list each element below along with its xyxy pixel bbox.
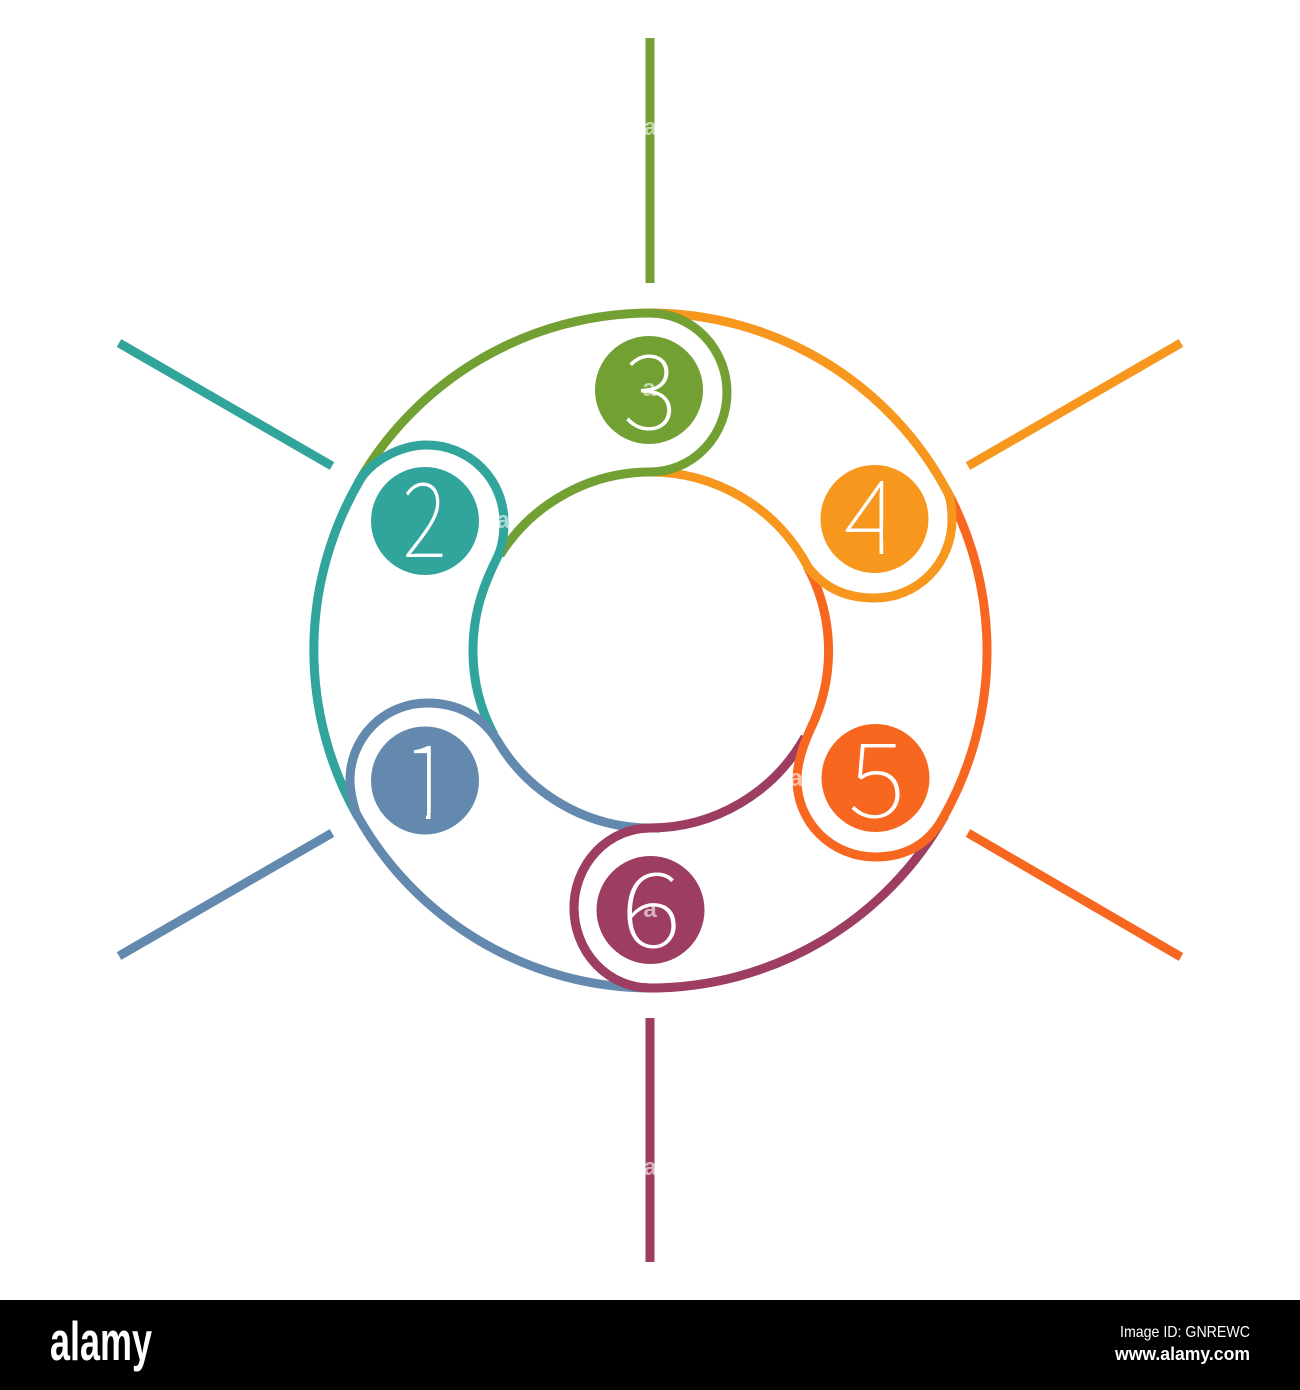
spoke 2: teal upper left line: [119, 343, 332, 466]
spoke 5: red-orange lower right line: [968, 833, 1181, 957]
footer logo: alamy: [50, 1310, 152, 1372]
segment 6: purple: [574, 737, 945, 988]
segment 2: teal: [314, 438, 504, 817]
badge 5: 5: [849, 696, 905, 847]
badge 3: 3: [623, 308, 677, 459]
badge 6: [596, 826, 704, 977]
badge 2: [371, 438, 479, 588]
segment 6 loop overlapping the end of segment 1: [574, 828, 660, 988]
segment 3: green: [358, 308, 727, 555]
watermark fragments: [496, 114, 803, 1181]
badge 1: 1: [400, 698, 454, 849]
segment 4: orange: [650, 313, 952, 598]
watermark fragments: a: [642, 375, 656, 402]
segment 2 outline: [314, 445, 504, 817]
badge 2: 2: [402, 438, 447, 588]
segment 4 outline: [650, 313, 952, 598]
website: www.alamy.com: [1114, 1344, 1250, 1364]
segment 5: red-orange: [797, 489, 987, 857]
segment 6 outline: [574, 737, 945, 988]
segment 1 outline: [350, 703, 650, 988]
spoke 6: purple bottom line: [646, 1018, 654, 1262]
spoke 4: orange upper right line: [968, 343, 1181, 466]
spoke 1: blue lower left line: [119, 833, 332, 956]
watermark fragments: a: [789, 765, 803, 792]
footer bar: [0, 1300, 1300, 1390]
segment 1: blue: [350, 698, 650, 988]
spoke 3: green top line: [646, 38, 654, 283]
watermark fragments: a: [643, 896, 657, 923]
watermark fragments: a: [643, 1154, 657, 1181]
badge 4: 4: [844, 433, 898, 584]
segment 5 outline: [797, 489, 987, 857]
watermark fragments: a: [496, 507, 510, 534]
badge 4: [820, 433, 928, 584]
badge 1: [371, 698, 479, 849]
watermark fragments: a: [643, 114, 657, 141]
image id: Image ID: GNREWC: [1120, 1324, 1250, 1341]
segment 3 outline: [358, 313, 727, 555]
badge 3: [595, 308, 703, 459]
badge 5: [822, 696, 930, 847]
badge 6: 6: [621, 826, 681, 977]
